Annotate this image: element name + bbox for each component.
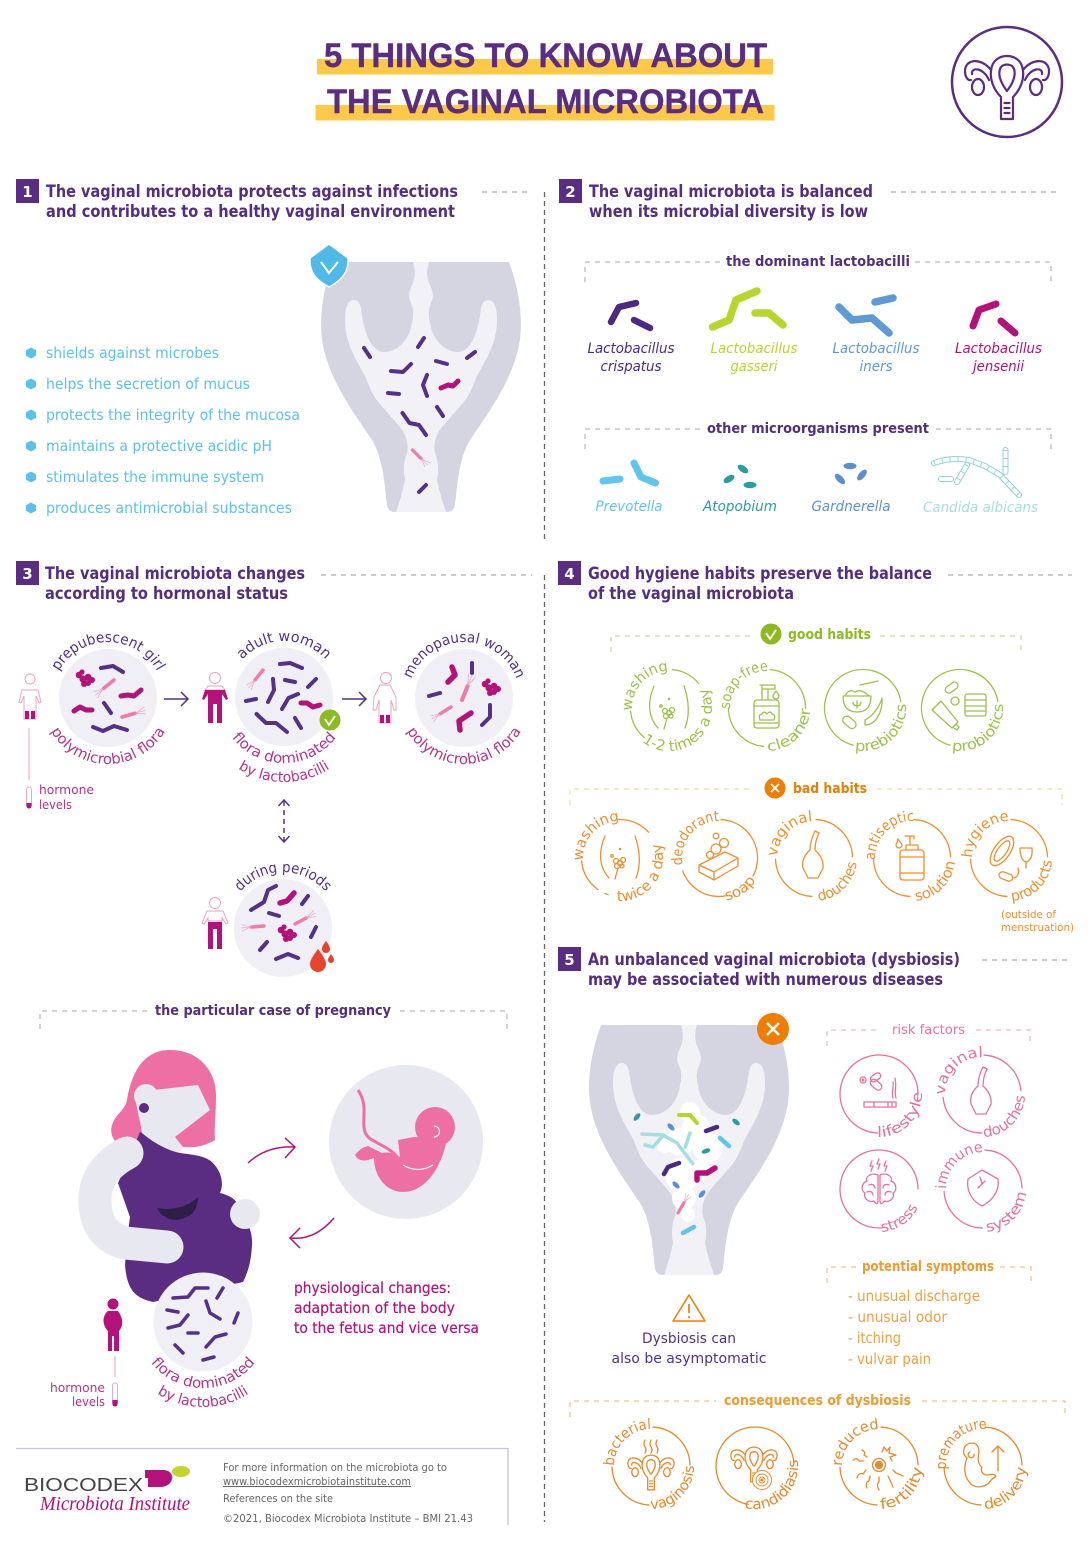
note: outside of menstruation: menstruation): [1001, 922, 1074, 934]
heading 2: [559, 179, 1058, 221]
consequences header: consequences of dysbiosis: [724, 1393, 911, 1409]
dominant lactobacilli: [585, 254, 1051, 375]
Lactobacillus jensenii: [955, 304, 1042, 375]
benefits list: shields against microbes: [46, 344, 219, 362]
prepubescent girl: prepubescent girl: [52, 634, 166, 672]
icon: bacterial vaginosis: bacterial: [602, 1418, 650, 1465]
icon: reduced fertility: reduced: [834, 1418, 878, 1465]
pregnancy flora: by lactobacilli: [158, 1384, 248, 1408]
physiological changes: to the fetus and vice versa: [294, 1319, 479, 1337]
icon: deodorant soap: deodorant: [671, 811, 719, 864]
icon: washing 1-2 times a day: washing: [624, 663, 667, 710]
heading 4: Good hygiene habits preserve the balance: [588, 564, 932, 583]
icon: soap-free cleaner: [722, 663, 810, 751]
panel 1: protection: [16, 179, 532, 517]
icon: prebiotics: prebiotics: [856, 704, 906, 754]
icon: washing twice a day: washing: [574, 813, 618, 860]
prepubescent girl: [49, 634, 166, 764]
during periods: during periods: [236, 864, 331, 890]
heading 1: The vaginal microbiota protects against infections: [46, 182, 458, 201]
note: outside of menstruation: [1001, 909, 1074, 934]
asymptomatic warning: [612, 1295, 767, 1367]
adult woman: adult woman: [238, 632, 330, 659]
adult woman: flora dominated: [232, 731, 336, 764]
icon: antiseptic solution: solution: [916, 862, 955, 901]
physiological changes: [294, 1279, 479, 1337]
arrow: adult to menopausal: [342, 692, 366, 706]
Prevotella: [596, 463, 662, 515]
Lactobacillus crispatus: [588, 303, 674, 375]
adult woman: [232, 632, 340, 782]
icon: lifestyle: lifestyle: [878, 1092, 922, 1137]
icon: probiotics: [920, 668, 1003, 754]
menopausal woman: [404, 632, 523, 764]
icon: soap-free cleaner: soap-free: [722, 663, 768, 708]
icon: washing twice a day: [574, 813, 666, 901]
icon: prebiotics: [824, 668, 906, 754]
Lactobacillus gasseri: Lactobacillus: [710, 341, 798, 357]
icon: immune system: system: [986, 1192, 1026, 1233]
heading 4: of the vaginal microbiota: [588, 584, 794, 603]
person: adult: [202, 672, 228, 723]
arrow from fetus: [290, 1218, 334, 1248]
footer text: For more information on the microbiota go to: [223, 1462, 447, 1474]
check badge: [320, 710, 340, 730]
heading 1: 1: [22, 183, 33, 201]
icon: lifestyle: [839, 1054, 922, 1137]
benefits list: stimulates the immune system: [46, 468, 264, 486]
Lactobacillus gasseri: gasseri: [730, 359, 778, 375]
balanced vagina diagram: [321, 262, 521, 512]
icon: risk vaginal douches: [936, 1046, 1025, 1137]
footer text: [223, 1462, 473, 1525]
Atopobium: Atopobium: [702, 499, 777, 515]
person: menopausal: [373, 672, 396, 723]
footer text: www.biocodexmicrobiotainstitute.com: [223, 1476, 411, 1488]
logo: [24, 1466, 190, 1515]
benefits list: protects the integrity of the mucosa: [46, 406, 300, 424]
heading 5: may be associated with numerous diseases: [588, 970, 943, 989]
benefits list: helps the secretion of mucus: [46, 375, 250, 393]
during periods: [234, 864, 334, 977]
heading 1: [16, 179, 532, 221]
pregnant woman: [95, 1050, 260, 1302]
good habits header: [611, 624, 1021, 652]
pregnancy bracket: the particular case of pregnancy: [155, 1003, 391, 1019]
other microorganisms: [585, 421, 1051, 516]
dividers: [544, 192, 546, 1522]
icon: washing 1-2 times a day: 1-2 times a day: [643, 690, 713, 751]
consequences header: [570, 1393, 1065, 1417]
benefits list: maintains a protective acidic pH: [46, 437, 272, 455]
Gardnerella: Gardnerella: [812, 499, 890, 515]
prepubescent girl: polymicrobial flora: [49, 728, 164, 764]
heading 5: 5: [564, 951, 575, 969]
Lactobacillus crispatus: Lactobacillus: [588, 341, 674, 357]
panel 5: dysbiosis: [558, 947, 1067, 1510]
heading 3: The vaginal microbiota changes: [45, 564, 305, 583]
icon: bacterial vaginosis: [602, 1418, 694, 1509]
icon: dysbiosis cross: [757, 1013, 789, 1045]
icon: hygiene products: hygiene: [961, 813, 1008, 857]
panel 3: hormonal status: [16, 561, 532, 1409]
good habits header: good habits: [788, 627, 871, 643]
person: girl: [19, 674, 41, 719]
icon: uterus badge: [952, 27, 1062, 137]
icon: immune system: immune: [935, 1144, 982, 1188]
Lactobacillus iners: iners: [860, 359, 892, 375]
fetus circle: [329, 1065, 483, 1219]
Atopobium: [702, 463, 777, 515]
icon: bacterial vaginosis: vaginosis: [650, 1466, 694, 1509]
icon: candidiasis: [715, 1426, 798, 1510]
icon: premature delivery: delivery: [985, 1467, 1028, 1509]
bad habits header: bad habits: [793, 781, 867, 797]
Lactobacillus crispatus: crispatus: [600, 359, 662, 375]
icon: washing 1-2 times a day: [624, 663, 713, 751]
Candida albicans: [923, 450, 1038, 516]
icon: probiotics: probiotics: [953, 704, 1003, 754]
icon: risk vaginal douches: vaginal: [936, 1046, 982, 1094]
Candida albicans: Candida albicans: [923, 500, 1038, 516]
title: THE VAGINAL MICROBIOTA: [327, 83, 764, 121]
icon: deodorant soap: [671, 811, 758, 900]
Lactobacillus jensenii: jensenii: [971, 359, 1024, 375]
blood drops: [310, 941, 334, 972]
arrow to fetus: [248, 1138, 295, 1163]
hormone levels scale: levels: [39, 797, 72, 812]
other microorganisms: other microorganisms present: [707, 421, 929, 437]
menopausal woman: menopausal woman: [404, 632, 523, 678]
icon: vaginal douches: vaginal: [769, 810, 812, 855]
adult woman: by lactobacilli: [239, 760, 329, 782]
pregnancy flora: [152, 1272, 254, 1408]
pregnancy bracket: [40, 1003, 507, 1029]
heading 2: when its microbial diversity is low: [589, 202, 868, 221]
icon: antiseptic solution: [866, 810, 955, 901]
icon: premature delivery: premature: [938, 1420, 986, 1468]
heading 3: 3: [22, 565, 33, 583]
benefits list: produces antimicrobial substances: [46, 499, 292, 517]
Lactobacillus iners: Lactobacillus: [832, 341, 920, 357]
icon: stress: [839, 1149, 919, 1232]
footer text: ©2021, Biocodex Microbiota Institute – BMI 21.43: [223, 1513, 473, 1525]
icon: candidiasis: candidiasis: [746, 1460, 798, 1510]
potential symptoms: - vulvar pain: [848, 1350, 931, 1368]
potential symptoms: - unusual discharge: [848, 1287, 980, 1305]
heading 2: 2: [565, 183, 576, 201]
heading 4: [558, 561, 1072, 603]
menopausal woman: polymicrobial flora: [405, 728, 520, 764]
dominant lactobacilli: the dominant lactobacilli: [726, 254, 910, 270]
potential symptoms: - unusual odor: [848, 1308, 948, 1326]
icon: washing twice a day: twice a day: [617, 845, 666, 901]
icon: immune system: [935, 1144, 1026, 1233]
icon: reduced fertility: [834, 1418, 924, 1509]
potential symptoms: [827, 1259, 1031, 1368]
icon: shield: [310, 244, 348, 287]
pregnant figure and hormone levels: levels: [72, 1394, 105, 1409]
icon: risk vaginal douches: douches: [984, 1096, 1025, 1137]
risk factors header: [827, 1022, 1030, 1046]
icon: hygiene products: products: [1012, 860, 1052, 904]
heading 4: 4: [564, 565, 575, 583]
Lactobacillus gasseri: [710, 291, 798, 375]
asymptomatic warning: Dysbiosis can: [642, 1331, 736, 1347]
heading 1: and contributes to a healthy vaginal environment: [46, 202, 455, 221]
physiological changes: physiological changes:: [294, 1279, 451, 1297]
icon: soap-free cleaner: cleaner: [768, 708, 810, 751]
risk factors header: risk factors: [892, 1022, 965, 1038]
icon: vaginal douches: douches: [818, 862, 856, 900]
heading 2: The vaginal microbiota is balanced: [589, 182, 873, 201]
icon: hygiene products: [961, 813, 1052, 904]
icon: deodorant soap: soap: [726, 878, 754, 900]
Lactobacillus jensenii: Lactobacillus: [955, 341, 1042, 357]
pregnant figure and hormone levels: hormone: [50, 1380, 105, 1395]
heading 3: [16, 561, 532, 603]
hormone levels scale: [26, 728, 94, 812]
panel 4: hygiene: [558, 561, 1074, 934]
icon: stress: stress: [882, 1204, 917, 1232]
icon: antiseptic solution: antiseptic: [866, 810, 914, 860]
dysbiosis vagina diagram: [589, 1025, 789, 1275]
arrow: girl to adult: [164, 692, 188, 706]
title: [316, 37, 774, 121]
note: outside of menstruation: (outside of: [1001, 909, 1056, 921]
person: periods: [202, 898, 228, 949]
heading 3: according to hormonal status: [45, 584, 288, 603]
pregnancy flora: flora dominated: [152, 1356, 254, 1388]
Prevotella: Prevotella: [596, 499, 662, 515]
icon: vaginal douches: [769, 810, 856, 900]
heading 5: [558, 947, 1072, 989]
logo: Microbiota Institute: [39, 1493, 190, 1515]
potential symptoms: potential symptoms: [862, 1259, 994, 1275]
pregnant figure and hormone levels: [50, 1298, 122, 1409]
footer text: References on the site: [223, 1493, 333, 1505]
title: 5 THINGS TO KNOW ABOUT: [324, 37, 767, 75]
potential symptoms: - itching: [848, 1329, 901, 1347]
hormone levels scale: hormone: [39, 782, 94, 797]
Gardnerella: [812, 463, 890, 515]
bad habits header: [570, 778, 1062, 805]
panel 2: balance: [559, 179, 1058, 516]
footer: [16, 1448, 508, 1525]
icon: reduced fertility: fertility: [880, 1467, 924, 1509]
Lactobacillus iners: [832, 298, 920, 375]
physiological changes: adaptation of the body: [294, 1299, 455, 1317]
benefits list: [26, 344, 300, 517]
heading 5: An unbalanced vaginal microbiota (dysbiosis): [588, 950, 960, 969]
arrow: adult and periods: [278, 800, 290, 842]
logo: BIOCODEX: [24, 1475, 143, 1495]
icon: premature delivery: [938, 1420, 1028, 1509]
asymptomatic warning: also be asymptomatic: [612, 1351, 767, 1367]
